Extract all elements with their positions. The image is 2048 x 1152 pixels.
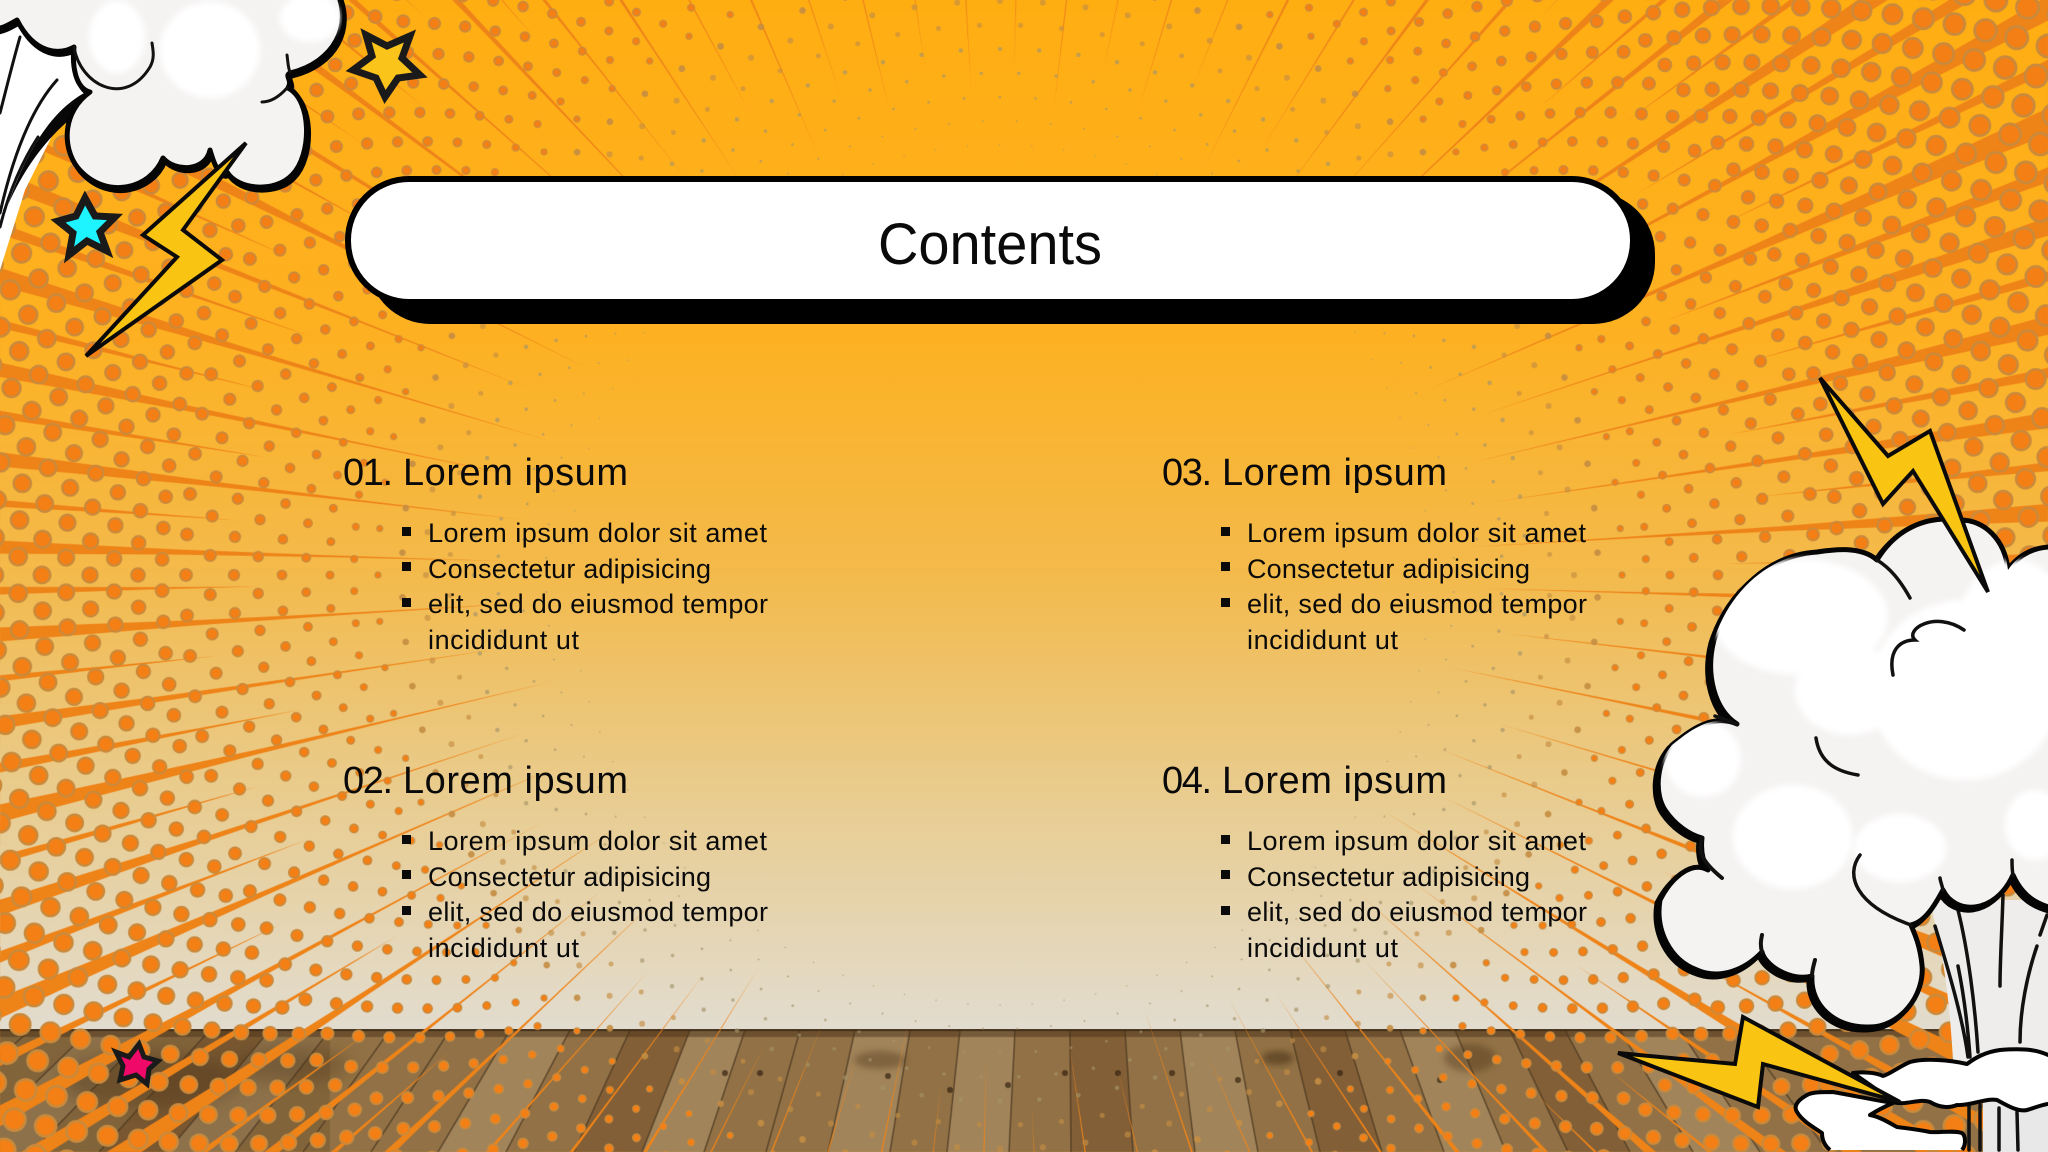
contents item 04: 04. bbox=[1162, 760, 1212, 802]
contents item 03: 03. bbox=[1162, 452, 1212, 494]
lightning bolt top left bbox=[86, 143, 246, 356]
contents item 03: Lorem ipsum bbox=[1222, 452, 1447, 494]
contents item 01: Lorem ipsum dolor sit amet bbox=[428, 518, 767, 548]
lightning bolt bottom right bbox=[1618, 1017, 1900, 1107]
contents item 03: Lorem ipsum dolor sit amet bbox=[1247, 518, 1586, 548]
contents item 02: elit, sed do eiusmod tempor bbox=[428, 897, 768, 927]
panel: title pill bbox=[348, 179, 1655, 324]
contents item 04: Consectetur adipisicing bbox=[1247, 862, 1530, 892]
explosion stem right bbox=[1933, 894, 2048, 1152]
contents item 01 bbox=[343, 452, 768, 655]
contents item 04: incididunt ut bbox=[1247, 933, 1398, 963]
contents item 01: 01. bbox=[343, 452, 393, 494]
contents item 04 bbox=[1162, 760, 1587, 963]
star: pink bbox=[116, 1044, 158, 1084]
wooden floor bbox=[0, 1029, 2048, 1152]
contents item 04: Lorem ipsum dolor sit amet bbox=[1247, 826, 1586, 856]
star: cyan bbox=[58, 198, 115, 255]
contents item 03: incididunt ut bbox=[1247, 625, 1398, 655]
contents item 02: incididunt ut bbox=[428, 933, 579, 963]
contents item 01: Lorem ipsum bbox=[403, 452, 628, 494]
lightning bolt right bbox=[1820, 378, 1988, 592]
contents item 02: Lorem ipsum bbox=[403, 760, 628, 802]
contents item 02: Lorem ipsum dolor sit amet bbox=[428, 826, 767, 856]
explosion cloud top left bbox=[0, 0, 347, 270]
contents item 03: Consectetur adipisicing bbox=[1247, 554, 1530, 584]
title: Contents bbox=[878, 212, 1102, 277]
contents item 01: Consectetur adipisicing bbox=[428, 554, 711, 584]
contents item 03 bbox=[1162, 452, 1587, 655]
star: gold bbox=[353, 35, 420, 97]
explosion cloud right bbox=[1652, 516, 2048, 1032]
contents item 01: elit, sed do eiusmod tempor bbox=[428, 589, 768, 619]
contents item 01: incididunt ut bbox=[428, 625, 579, 655]
contents item 02 bbox=[343, 760, 768, 963]
contents item 02: Consectetur adipisicing bbox=[428, 862, 711, 892]
contents item 03: elit, sed do eiusmod tempor bbox=[1247, 589, 1587, 619]
small clouds bottom right bbox=[1794, 1047, 2048, 1152]
contents item 04: Lorem ipsum bbox=[1222, 760, 1447, 802]
contents item 02: 02. bbox=[343, 760, 393, 802]
contents item 04: elit, sed do eiusmod tempor bbox=[1247, 897, 1587, 927]
